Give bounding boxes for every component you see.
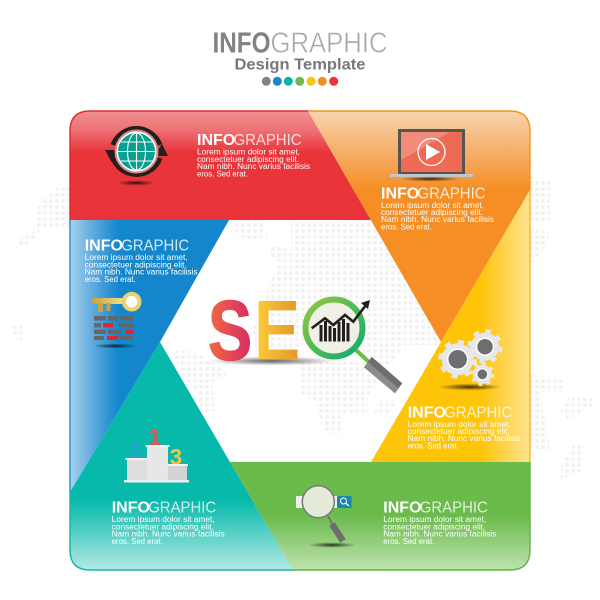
SEO logo with magnifier: E xyxy=(254,283,300,377)
text: yellow panel: Nam nibh. Nunc varius facilisis xyxy=(408,434,521,443)
text: teal panel: INFO xyxy=(112,500,150,517)
text: yellow panel: INFO xyxy=(408,404,446,421)
panel: orange top-right xyxy=(308,111,530,342)
icon: search magnifier xyxy=(296,486,356,548)
text: blue panel: Nam nibh. Nunc varius facilisis xyxy=(85,268,198,277)
SEO logo with magnifier xyxy=(208,283,402,393)
text: red panel: Lorem ipsum dolor sit amet, xyxy=(197,148,300,157)
text: blue panel: INFO xyxy=(85,238,123,255)
text: teal panel: GRAPHIC xyxy=(148,500,216,517)
text: orange panel xyxy=(381,185,494,231)
colour dots xyxy=(262,77,338,86)
icon: podium: 3 xyxy=(170,444,182,470)
dotted world map background xyxy=(10,176,592,480)
panel: blue left xyxy=(70,220,229,492)
text: teal panel: consectetuer adipiscing elit. xyxy=(112,522,214,531)
text: yellow panel: Lorem ipsum dolor sit amet, xyxy=(408,420,511,429)
panel: yellow right xyxy=(371,190,530,462)
text: blue panel: eros. Sed erat. xyxy=(85,275,136,284)
SEO logo with magnifier: S xyxy=(208,284,252,378)
text: blue panel: consectetuer adipiscing elit. xyxy=(85,260,187,269)
text: blue panel: GRAPHIC xyxy=(121,238,189,255)
text: red panel xyxy=(197,132,310,178)
panel: green bottom-right xyxy=(230,462,530,570)
text: teal panel: Lorem ipsum dolor sit amet, xyxy=(112,515,215,524)
text: orange panel: Lorem ipsum dolor sit amet, xyxy=(381,201,484,210)
text: yellow panel: eros. Sed erat. xyxy=(408,441,459,450)
icon: podium: 2 xyxy=(130,441,142,463)
title: GRAPHIC xyxy=(270,28,388,60)
title xyxy=(212,28,388,60)
text: yellow panel: GRAPHIC xyxy=(444,404,512,421)
text: green panel: eros. Sed erat. xyxy=(383,537,434,546)
text: teal panel: eros. Sed erat. xyxy=(112,537,163,546)
text: green panel: consectetuer adipiscing elit. xyxy=(383,522,485,531)
text: green panel: INFO xyxy=(383,500,422,517)
text: green panel: GRAPHIC xyxy=(420,500,488,517)
text: red panel: GRAPHIC xyxy=(234,132,302,149)
text: green panel: Lorem ipsum dolor sit amet, xyxy=(383,515,486,524)
icon: gears xyxy=(438,332,502,390)
text: teal panel: Nam nibh. Nunc varius facilisis xyxy=(112,530,225,539)
icon: globe with arrows xyxy=(105,129,168,186)
text: red panel: eros. Sed erat. xyxy=(197,169,248,178)
text: yellow panel: consectetuer adipiscing elit. xyxy=(408,427,510,436)
text: blue panel: Lorem ipsum dolor sit amet, xyxy=(85,253,188,262)
icon: magnifier with rising chart xyxy=(306,300,402,393)
text: green panel: Nam nibh. Nunc varius facilisis xyxy=(383,530,496,539)
subtitle: Design Template xyxy=(234,56,366,73)
text: orange panel: INFO xyxy=(381,185,419,202)
panel: red top-left xyxy=(70,111,371,220)
text: green panel xyxy=(383,500,496,546)
text: teal panel xyxy=(112,500,225,546)
text: orange panel: eros. Sed erat. xyxy=(381,222,432,231)
text: red panel: Nam nibh. Nunc varius facilisis xyxy=(197,162,310,171)
text: blue panel xyxy=(85,238,198,284)
text: red panel: INFO xyxy=(197,132,235,149)
icon: laptop with play button xyxy=(390,129,473,182)
panel: teal bottom-left xyxy=(70,342,293,570)
title: INFO xyxy=(212,28,270,60)
icon: gold key and brick wall xyxy=(91,294,140,348)
text: orange panel: GRAPHIC xyxy=(418,185,486,202)
text: orange panel: consectetuer adipiscing elit. xyxy=(381,208,483,217)
icon: podium: 1 xyxy=(148,424,161,450)
text: yellow panel xyxy=(408,404,521,450)
text: red panel: consectetuer adipiscing elit. xyxy=(197,155,299,164)
text: orange panel: Nam nibh. Nunc varius facilisis xyxy=(381,215,494,224)
icon: podium xyxy=(124,424,189,482)
